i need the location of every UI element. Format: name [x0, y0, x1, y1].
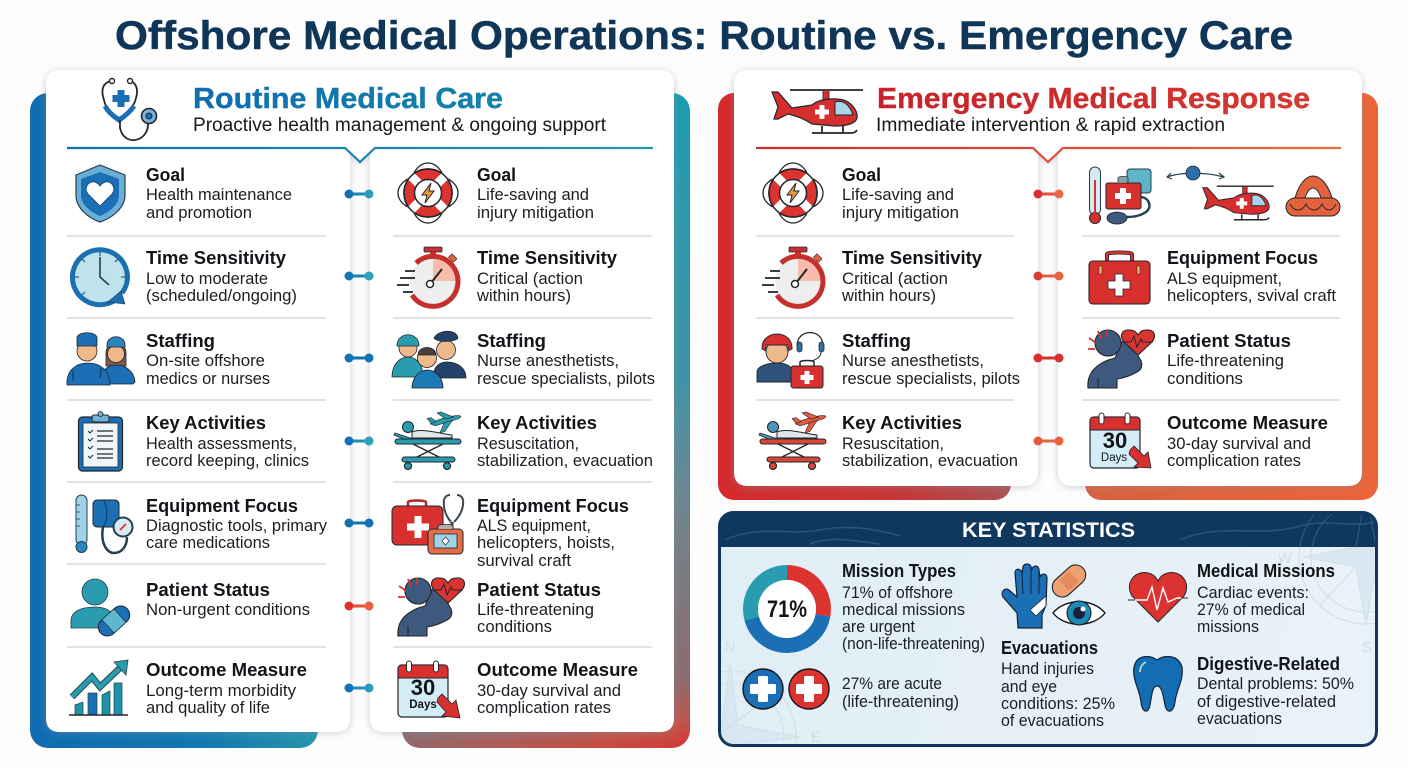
icon: patient with bandage: [71, 579, 133, 640]
row: patient status: [1088, 330, 1291, 388]
text: staffing: On-site offshore: [146, 352, 265, 370]
text: outcome measure: [1167, 413, 1328, 470]
text: key activities: Resuscitation,: [842, 435, 944, 453]
text: mission types: medical missions: [842, 601, 965, 619]
text: patient status: [1167, 331, 1291, 388]
icon: clock: [72, 250, 128, 305]
heading: routine medical care: Routine Medical Care: [193, 83, 503, 115]
text: equipment focus: care medications: [146, 534, 270, 552]
text: equipment focus: Equipment Focus: [146, 496, 298, 516]
text: mission types: (non-life-threatening): [842, 635, 985, 653]
text: acute share: 27% are acute: [842, 675, 942, 693]
row: equipment focus: [76, 495, 328, 553]
icon: stethoscope: [102, 78, 156, 140]
row: key activities: [78, 412, 309, 471]
icon: stopwatch: [762, 247, 823, 306]
text: goal: [477, 165, 594, 222]
text: staffing: rescue specialists, pilots: [842, 370, 1020, 388]
text: key activities: Resuscitation,: [477, 435, 579, 453]
text: time sensitivity: Critical (action: [842, 270, 948, 288]
text: goal: injury mitigation: [842, 204, 959, 222]
icon: patient in pain: [398, 578, 464, 636]
text: mission types: 71% of offshore: [842, 584, 953, 602]
icon: clipboard: [78, 412, 122, 471]
text: time sensitivity: [476, 248, 617, 305]
stat: medical missions: [1128, 561, 1335, 636]
text: goal: injury mitigation: [477, 204, 594, 222]
text: key activities: record keeping, clinics: [146, 452, 309, 470]
icon: life buoy: [763, 163, 823, 223]
row: key activities: [759, 408, 1018, 470]
text: patient status: Patient Status: [1167, 331, 1291, 351]
text: time sensitivity: [146, 248, 297, 305]
text: outcome measure: Long-term morbidity: [146, 682, 297, 700]
panel: key statistics: S: [1362, 639, 1372, 656]
text: medical missions: [1197, 561, 1335, 636]
text: mission types: [842, 561, 985, 653]
row: staffing: [67, 331, 270, 388]
icon: medical crosses: [743, 669, 829, 709]
text: goal: and promotion: [146, 204, 252, 222]
text: outcome measure: [146, 660, 307, 717]
icon: stretcher and plane: [394, 408, 463, 470]
row: outcome measure: [69, 660, 307, 717]
text: evacuations: and eye: [1001, 678, 1057, 696]
column: emergency right: [1088, 166, 1340, 470]
text: goal: [146, 165, 292, 222]
text: equipment focus: survival craft: [477, 552, 571, 570]
text: patient status: Non-urgent conditions: [146, 601, 310, 619]
stat: evacuations: [1001, 561, 1115, 730]
text: goal: Health maintenance: [146, 186, 292, 204]
text: staffing: Staffing: [842, 331, 911, 351]
text: staffing: Staffing: [477, 331, 546, 351]
panel: routine medical care: [30, 70, 690, 748]
icon: life buoy: [398, 163, 458, 223]
text: outcome measure: complication rates: [1167, 452, 1301, 470]
text: evacuations: [1001, 638, 1115, 730]
column: emergency left: [757, 163, 1020, 470]
text: outcome measure: Outcome Measure: [477, 660, 638, 680]
panel: emergency medical response: [718, 70, 1378, 500]
icon: shield heart: [76, 165, 125, 222]
icon: medical kit and monitor: [392, 495, 463, 554]
icon: 30 day calendar: Days: [1101, 452, 1127, 464]
text: equipment focus: [146, 496, 328, 552]
text: staffing: rescue specialists, pilots: [477, 370, 655, 388]
text: outcome measure: 30-day survival and: [1167, 435, 1311, 453]
icon: first aid kit: [1089, 252, 1150, 304]
text: goal: Goal: [842, 165, 881, 185]
icon: 30 day calendar: [398, 661, 460, 718]
text: time sensitivity: within hours): [476, 287, 571, 305]
text: goal: Goal: [146, 165, 185, 185]
text: key activities: stabilization, evacuation: [477, 452, 653, 470]
row: staffing: [392, 331, 655, 388]
text: staffing: [842, 331, 1020, 388]
text: outcome measure: Outcome Measure: [1167, 413, 1328, 433]
text: equipment focus: [1167, 248, 1336, 305]
text: time sensitivity: Low to moderate: [146, 270, 268, 288]
icon: 30 day calendar: [1090, 413, 1151, 468]
text: patient status: Life-threatening: [477, 601, 594, 619]
subtitle: routine: Proactive health management & ongoing support: [193, 115, 607, 136]
icon: rescue crew: [392, 331, 466, 388]
text: outcome measure: and quality of life: [146, 699, 270, 717]
text: digestive-related: Dental problems: 50%: [1197, 675, 1354, 693]
text: evacuations: Hand injuries: [1001, 660, 1094, 678]
text: equipment focus: helicopters, hoists,: [477, 534, 615, 552]
text: outcome measure: Outcome Measure: [146, 660, 307, 680]
icon: rising chart: [69, 660, 128, 715]
text: evacuations: conditions: 25%: [1001, 695, 1115, 713]
text: digestive-related: Digestive-Related: [1197, 654, 1340, 674]
text: key activities: Key Activities: [477, 413, 597, 433]
text: acute share: [842, 675, 959, 711]
text: equipment focus: ALS equipment,: [1167, 270, 1282, 288]
icon: life raft: [1286, 176, 1340, 216]
text: evacuations: Evacuations: [1001, 638, 1098, 658]
icon: 30 day calendar: 30: [411, 675, 435, 700]
row: equipment focus: [392, 495, 629, 570]
text: equipment focus: [477, 496, 629, 570]
text: equipment focus: helicopters, svival craft: [1167, 287, 1336, 305]
text: patient status: Patient Status: [477, 580, 601, 600]
text: staffing: Staffing: [146, 331, 215, 351]
text: acute share: (life-threatening): [842, 693, 959, 711]
row: time sensitivity: [397, 247, 617, 306]
text: digestive-related: evacuations: [1197, 710, 1282, 728]
row: equipment focus: [1089, 248, 1336, 305]
text: medical missions: 27% of medical: [1197, 601, 1305, 619]
chart: donut 71%: 71%: [767, 596, 807, 623]
row: time sensitivity: [762, 247, 982, 306]
text: equipment focus: ALS equipment,: [477, 517, 591, 535]
text: patient status: Life-threatening: [1167, 352, 1284, 370]
row: patient status: [71, 579, 310, 640]
text: goal: [842, 165, 959, 222]
subtitle: emergency: Immediate intervention & rapid extraction: [876, 115, 1225, 136]
text: mission types: Mission Types: [842, 561, 956, 581]
text: staffing: Nurse anesthetists,: [477, 352, 619, 370]
row: outcome measure: [1090, 413, 1328, 470]
text: time sensitivity: [841, 248, 982, 305]
text: time sensitivity: (scheduled/ongoing): [146, 287, 297, 305]
icon: transfer arrows: [1167, 166, 1224, 180]
text: staffing: medics or nurses: [146, 370, 270, 388]
panel: key statistics: W: [1278, 550, 1293, 567]
text: evacuations: of evacuations: [1001, 712, 1104, 730]
icon: stopwatch: [397, 247, 458, 306]
text: outcome measure: 30-day survival and: [477, 682, 621, 700]
text: goal: Life-saving and: [842, 186, 954, 204]
text: staffing: Nurse anesthetists,: [842, 352, 984, 370]
text: digestive-related: [1197, 654, 1354, 728]
text: time sensitivity: Critical (action: [477, 270, 583, 288]
icon: tooth: [1134, 657, 1182, 711]
connectors: emergency: [1034, 190, 1064, 446]
icon: stretcher and plane: [759, 408, 828, 470]
text: patient status: conditions: [477, 618, 552, 636]
stat: digestive-related: [1134, 654, 1354, 728]
icon group: equipment illustrations: [1090, 166, 1340, 224]
icon: heart with pulse: [1128, 573, 1188, 622]
text: goal: Goal: [477, 165, 516, 185]
icon: rescue helicopter: [1203, 186, 1274, 220]
text: time sensitivity: Time Sensitivity: [146, 248, 286, 268]
text: digestive-related: of digestive-related: [1197, 693, 1336, 711]
icon: bandage: [1048, 561, 1090, 601]
text: patient status: [146, 580, 310, 619]
text: patient status: Patient Status: [146, 580, 270, 600]
text: medical missions: missions: [1197, 618, 1259, 636]
connectors: routine: [344, 190, 374, 692]
row: outcome measure: [398, 660, 638, 718]
text: key activities: Key Activities: [146, 413, 266, 433]
icon: 30 day calendar: 30: [1103, 428, 1127, 453]
text: key activities: [146, 413, 309, 470]
text: mission types: are urgent: [842, 618, 915, 636]
text: staffing: [477, 331, 655, 388]
text: equipment focus: Equipment Focus: [477, 496, 629, 516]
text: patient status: conditions: [1167, 370, 1243, 388]
row: patient status: [398, 578, 601, 636]
stat: mission types: [743, 561, 985, 711]
icon: patient in pain: [1088, 330, 1154, 388]
icon: thermometer and blood pressure cuff: [76, 495, 132, 553]
text: key activities: [477, 413, 653, 470]
icon: nurses: [67, 333, 135, 385]
icon: eye: [1053, 601, 1105, 625]
text: time sensitivity: within hours): [841, 287, 936, 305]
panel: key statistics: N: [725, 639, 735, 656]
text: key activities: Key Activities: [842, 413, 962, 433]
heading: key statistics: KEY STATISTICS: [962, 519, 1135, 542]
column: routine right: [392, 163, 655, 718]
row: goal: [763, 163, 959, 223]
icon: 30 day calendar: Days: [409, 699, 437, 711]
row: time sensitivity: [72, 248, 297, 305]
text: goal: Life-saving and: [477, 186, 589, 204]
panel: key statistics: [718, 511, 1378, 747]
text: outcome measure: [477, 660, 638, 717]
text: key activities: [842, 413, 1018, 470]
text: key activities: stabilization, evacuation: [842, 452, 1018, 470]
text: equipment focus: Equipment Focus: [1167, 248, 1318, 268]
row: staffing: [757, 331, 1020, 388]
text: medical missions: Medical Missions: [1197, 561, 1335, 581]
text: equipment focus: Diagnostic tools, primary: [146, 517, 328, 535]
chart: donut 71%: [750, 572, 823, 645]
icon: pilot, headset and kit: [757, 332, 824, 388]
row: key activities: [394, 408, 653, 470]
panel: key statistics: E: [811, 729, 821, 746]
text: staffing: [146, 331, 270, 388]
icon: helicopter: [772, 90, 863, 133]
text: patient status: [477, 580, 601, 636]
text: time sensitivity: Time Sensitivity: [477, 248, 617, 268]
heading: emergency medical response: Emergency Medical Response: [877, 83, 1310, 115]
text: outcome measure: complication rates: [477, 699, 611, 717]
icon: thermometer, kit and cuff: [1090, 167, 1151, 224]
icon: injured hand: [1002, 564, 1047, 628]
row: goal: [398, 163, 594, 223]
text: key activities: Health assessments,: [146, 435, 297, 453]
row: goal: [76, 165, 292, 222]
title: Offshore Medical Operations: Routine vs. Emergency Care: [115, 14, 1293, 58]
text: time sensitivity: Time Sensitivity: [842, 248, 982, 268]
text: medical missions: Cardiac events:: [1197, 584, 1309, 602]
column: routine left: [67, 165, 328, 717]
